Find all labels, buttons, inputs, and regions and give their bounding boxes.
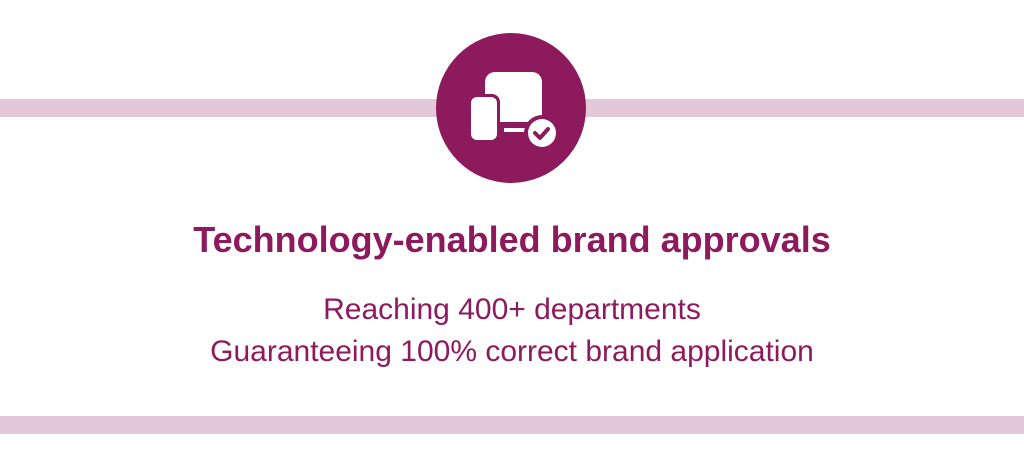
text block: Guaranteeing 100% correct brand application — [210, 335, 814, 368]
bottom band — [0, 416, 1024, 434]
icon: devices with check — [436, 33, 586, 183]
top band — [0, 99, 1024, 117]
text block — [210, 293, 814, 368]
title: Technology-enabled brand approvals — [193, 219, 831, 260]
text block: Reaching 400+ departments — [323, 293, 701, 326]
